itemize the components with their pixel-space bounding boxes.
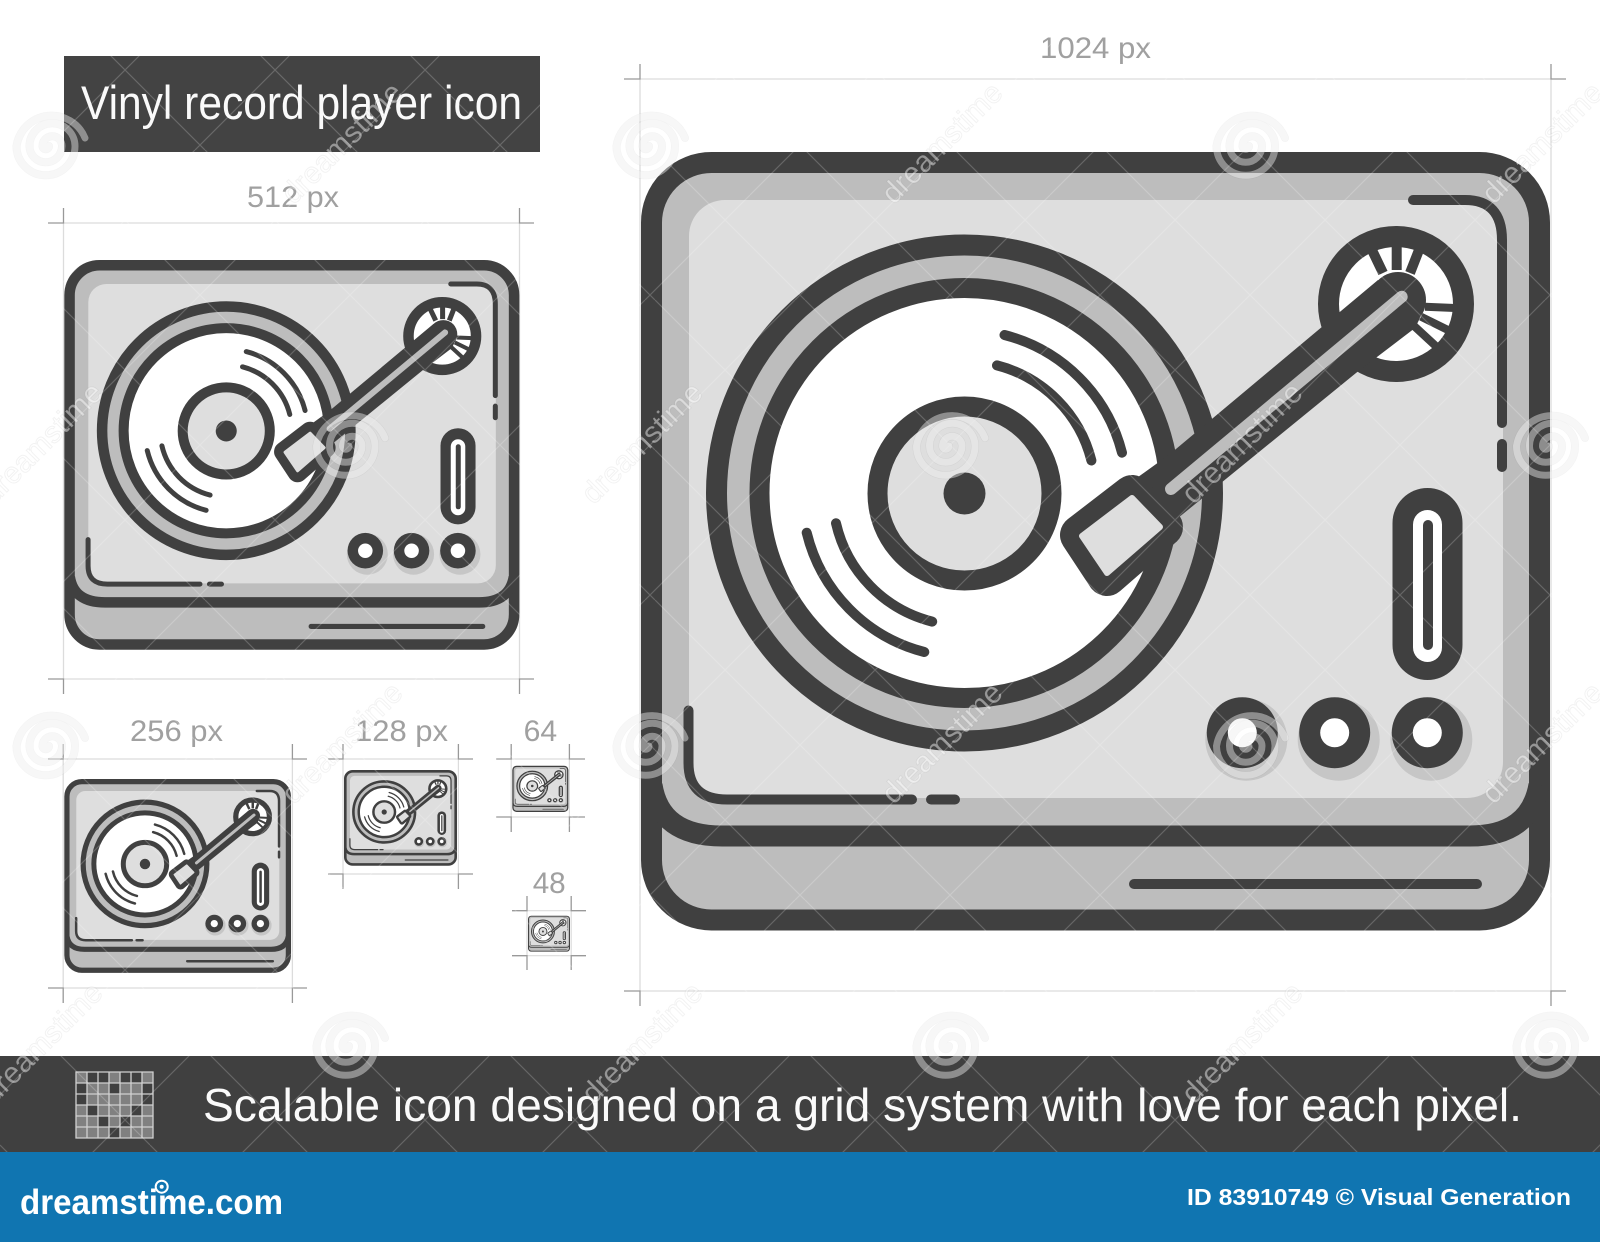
watermark overlay: dreamstime <box>575 376 709 510</box>
watermark overlay: dreamstime <box>1175 376 1309 510</box>
size guide: 256 px <box>48 715 307 1003</box>
icon: turntable 128 px <box>345 771 456 864</box>
icon: turntable 48 px <box>528 916 570 951</box>
icon: pixel grid <box>76 1072 153 1138</box>
size guide: 64 <box>496 715 585 832</box>
title banner: Vinyl record player icon <box>81 76 522 129</box>
size guide: 256 px: 256 px <box>130 715 223 748</box>
size guide: 1024 px: 1024 px <box>1040 32 1151 65</box>
footer bar <box>0 1152 1600 1242</box>
icon: turntable 256 px <box>67 782 288 970</box>
icon: turntable 512 px <box>70 265 514 644</box>
size guide: 512 px: 512 px <box>247 181 339 214</box>
icon: turntable 64 px <box>513 766 568 811</box>
icon: turntable 1024 px <box>652 162 1540 920</box>
watermark overlay: dreamstime <box>575 976 709 1110</box>
size guide: 128 px <box>328 715 473 889</box>
watermark overlay: dreamstime <box>1175 976 1309 1110</box>
brand logo: dreamstime.com <box>20 1183 283 1222</box>
size guide: 128 px: 128 px <box>355 715 448 748</box>
size guide: 512 px <box>48 181 534 694</box>
bottom caption band: Scalable icon designed on a grid system with love for each pixel. <box>203 1079 1522 1131</box>
size guide: 48: 48 <box>533 867 566 900</box>
watermark overlay: dreamstime <box>875 76 1009 210</box>
watermark overlay: dreamstime <box>875 676 1009 810</box>
size guide: 64: 64 <box>524 715 557 748</box>
image id and credit: ID 83910749 © Visual Generation <box>1187 1184 1571 1210</box>
size guide: 48 <box>512 867 586 970</box>
bottom caption band <box>0 1056 1600 1152</box>
title banner <box>64 56 540 152</box>
watermark overlay: dreamstime <box>275 76 409 210</box>
watermark overlay: dreamstime <box>275 676 409 810</box>
